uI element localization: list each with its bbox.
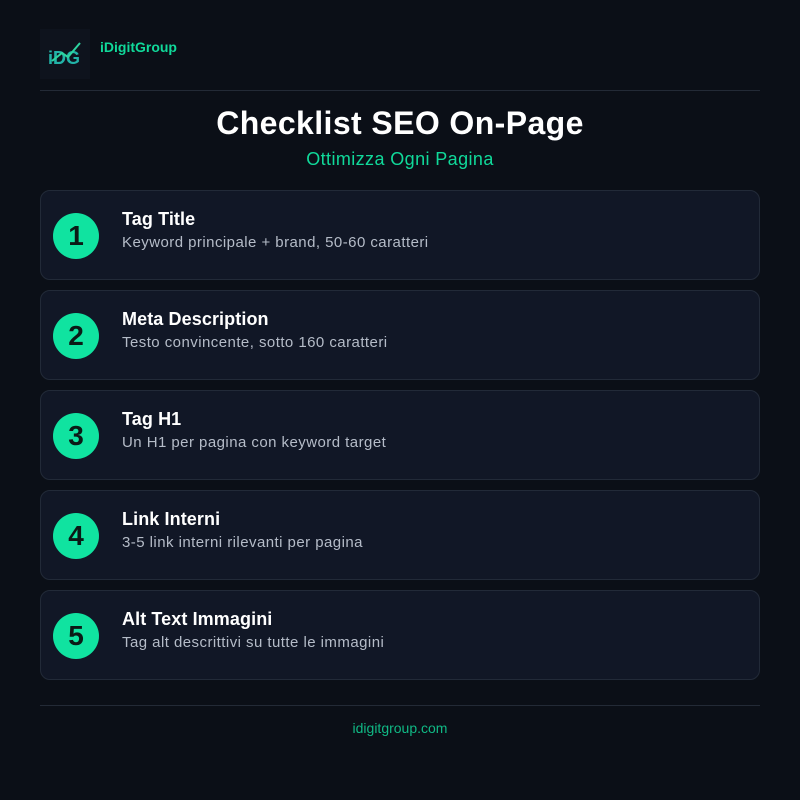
card 3 xyxy=(40,390,760,480)
card 3: 3 xyxy=(68,420,84,451)
card 2: Meta Description xyxy=(122,309,269,329)
card 4 xyxy=(40,490,760,580)
footer: idigitgroup.com xyxy=(353,720,447,736)
logo: iDG xyxy=(48,48,80,68)
card 2: 2 xyxy=(68,320,84,351)
card 5: 5 xyxy=(68,620,84,651)
card 5 xyxy=(40,590,760,680)
card 1 xyxy=(40,190,760,280)
card 4: 3-5 link interni rilevanti per pagina xyxy=(122,534,363,551)
brand name: iDigitGroup xyxy=(100,39,177,55)
card 1: Keyword principale + brand, 50-60 caratteri xyxy=(122,234,429,251)
card 1: Tag Title xyxy=(122,209,195,229)
card 4: 4 xyxy=(68,520,84,551)
card 3: Tag H1 xyxy=(122,409,181,429)
card 3: Un H1 per pagina con keyword target xyxy=(122,434,386,451)
title: Checklist SEO On-Page xyxy=(216,105,584,141)
card 5: Alt Text Immagini xyxy=(122,609,272,629)
logo xyxy=(40,29,90,79)
card 4: Link Interni xyxy=(122,509,220,529)
card 1: 1 xyxy=(68,220,84,251)
card 2: Testo convincente, sotto 160 caratteri xyxy=(122,334,388,351)
subtitle: Ottimizza Ogni Pagina xyxy=(306,149,494,169)
card 2 xyxy=(40,290,760,380)
card 5: Tag alt descrittivi su tutte le immagini xyxy=(122,634,384,651)
